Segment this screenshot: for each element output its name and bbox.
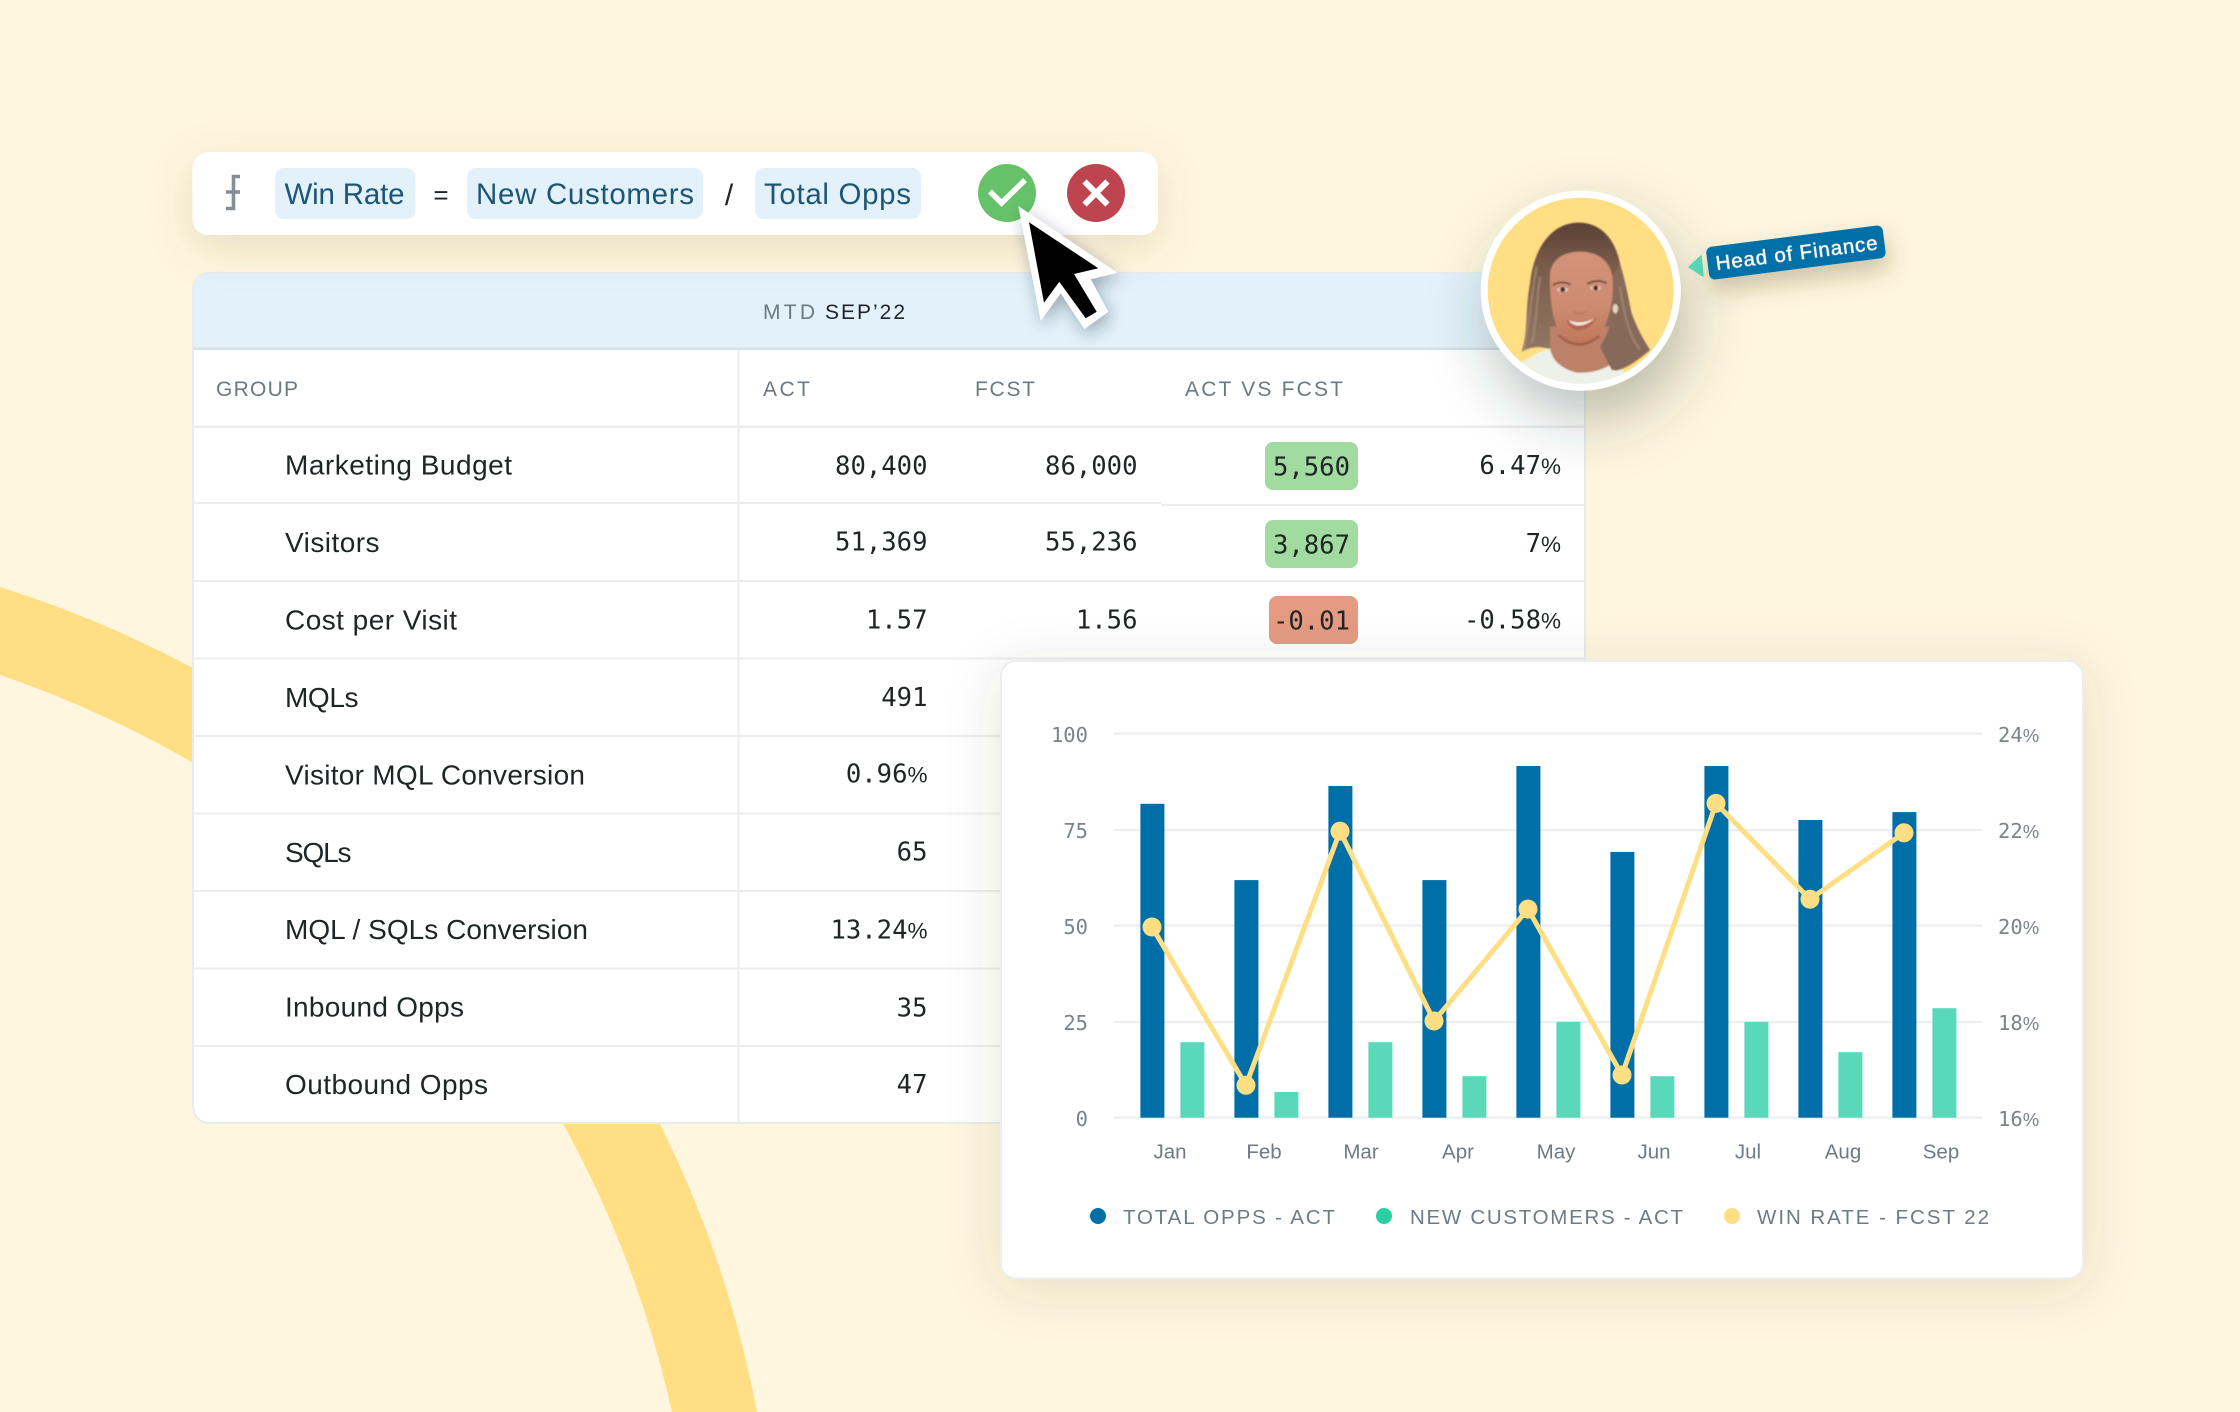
left axis labels: 75: [1063, 819, 1088, 843]
left axis labels: 0: [1076, 1107, 1088, 1131]
FCST column values: [1045, 452, 1138, 636]
chart legend: NEW CUSTOMERS - ACT: [1410, 1206, 1683, 1229]
left axis labels: [1051, 723, 1088, 1131]
chip: Total Opps: [755, 168, 921, 219]
row labels: MQLs: [285, 682, 358, 713]
period heading: SEP’22: [825, 301, 905, 324]
row labels: Outbound Opps: [285, 1069, 488, 1100]
right axis labels: 16%: [1998, 1107, 2039, 1131]
month labels: Sep: [1923, 1140, 1959, 1164]
row labels: Visitor MQL Conversion: [285, 760, 585, 790]
month labels: Jan: [1153, 1140, 1187, 1164]
variance percent values: 6.47%: [1479, 451, 1561, 481]
line: win rate: [1142, 794, 1914, 1095]
FCST column values: 1.56: [1076, 606, 1138, 636]
equals sign: =: [433, 180, 449, 210]
chart legend: TOTAL OPPS - ACT: [1123, 1206, 1335, 1229]
row labels: [285, 450, 588, 1100]
ACT column values: 51,369: [835, 528, 928, 558]
row labels: SQLs: [285, 837, 352, 868]
ACT column values: 35: [897, 994, 928, 1024]
row labels: Marketing Budget: [285, 450, 512, 480]
variance badges: -0.01: [1273, 606, 1350, 636]
icon: tag pointer: [1689, 256, 1703, 276]
chart legend: [1090, 1206, 1989, 1229]
row labels: MQL / SQLs Conversion: [285, 914, 588, 945]
bars: total opps: [1140, 766, 1916, 1118]
column headers: GROUP: [216, 378, 298, 401]
column headers: ACT: [763, 378, 810, 401]
ACT column values: 1.57: [866, 606, 928, 636]
formula bar: [192, 152, 1158, 235]
panel: monthly chart: [1001, 661, 2083, 1278]
icon: function symbol: [226, 176, 240, 208]
ACT column values: 13.24%: [830, 916, 928, 946]
column headers: FCST: [975, 378, 1035, 401]
month labels: Jul: [1735, 1140, 1761, 1164]
chip: Win Rate: [275, 168, 416, 219]
right axis labels: 18%: [1998, 1011, 2039, 1035]
month labels: Feb: [1246, 1140, 1282, 1164]
right axis labels: 22%: [1998, 819, 2039, 843]
row labels: Visitors: [285, 527, 380, 558]
decorative yellow arc: [0, 587, 757, 1412]
row labels: Inbound Opps: [285, 992, 464, 1022]
variance badges: 3,867: [1273, 530, 1350, 560]
label: Head of Finance tag: Head of Finance: [1714, 232, 1879, 275]
month labels: [1153, 1140, 1959, 1164]
chip: Total Opps: Total Opps: [764, 178, 911, 211]
ACT column values: 491: [881, 683, 928, 713]
variance badges: [1265, 442, 1358, 644]
left axis labels: 100: [1051, 723, 1088, 747]
ACT column values: 80,400: [835, 452, 928, 482]
chip: Win Rate: Win Rate: [284, 178, 404, 211]
month labels: May: [1537, 1140, 1576, 1164]
table header band: [193, 273, 1585, 1123]
ACT column values: 65: [897, 838, 928, 868]
left axis labels: 50: [1063, 915, 1088, 939]
icon: mouse cursor: [1018, 206, 1117, 329]
variance percent values: -0.58%: [1464, 606, 1561, 636]
icon: confirm check: [978, 164, 1036, 222]
row labels: Cost per Visit: [285, 604, 457, 636]
chip: New Customers: [467, 168, 703, 219]
period heading: [763, 301, 905, 324]
avatar: Head of Finance portrait: [1481, 191, 1681, 391]
ACT column values: 0.96%: [846, 760, 928, 790]
ACT column values: 47: [897, 1070, 928, 1100]
column headers: ACT VS FCST: [1185, 378, 1343, 401]
period heading: MTD: [763, 301, 815, 324]
column headers: [216, 378, 1343, 401]
chart legend: WIN RATE - FCST 22: [1757, 1206, 1989, 1229]
month labels: Mar: [1343, 1140, 1379, 1164]
FCST column values: 86,000: [1045, 452, 1138, 482]
panel: metrics table: [193, 273, 1585, 1123]
FCST column values: 55,236: [1045, 528, 1138, 558]
variance badges: 5,560: [1273, 452, 1350, 482]
right axis labels: [1998, 723, 2039, 1131]
month labels: Aug: [1825, 1140, 1861, 1164]
variance percent values: [1464, 451, 1561, 636]
month labels: Apr: [1442, 1140, 1474, 1164]
divide sign: /: [725, 179, 734, 212]
chart gridlines: [1114, 732, 1982, 1119]
ACT column values: [830, 452, 928, 1100]
right axis labels: 20%: [1998, 915, 2039, 939]
variance percent values: 7%: [1526, 529, 1561, 559]
month labels: Jun: [1637, 1140, 1671, 1164]
icon: cancel cross: [1067, 164, 1125, 222]
right axis labels: 24%: [1998, 723, 2039, 747]
bars: new customers: [1180, 1008, 1956, 1118]
left axis labels: 25: [1063, 1011, 1088, 1035]
chip: New Customers: New Customers: [476, 178, 694, 211]
